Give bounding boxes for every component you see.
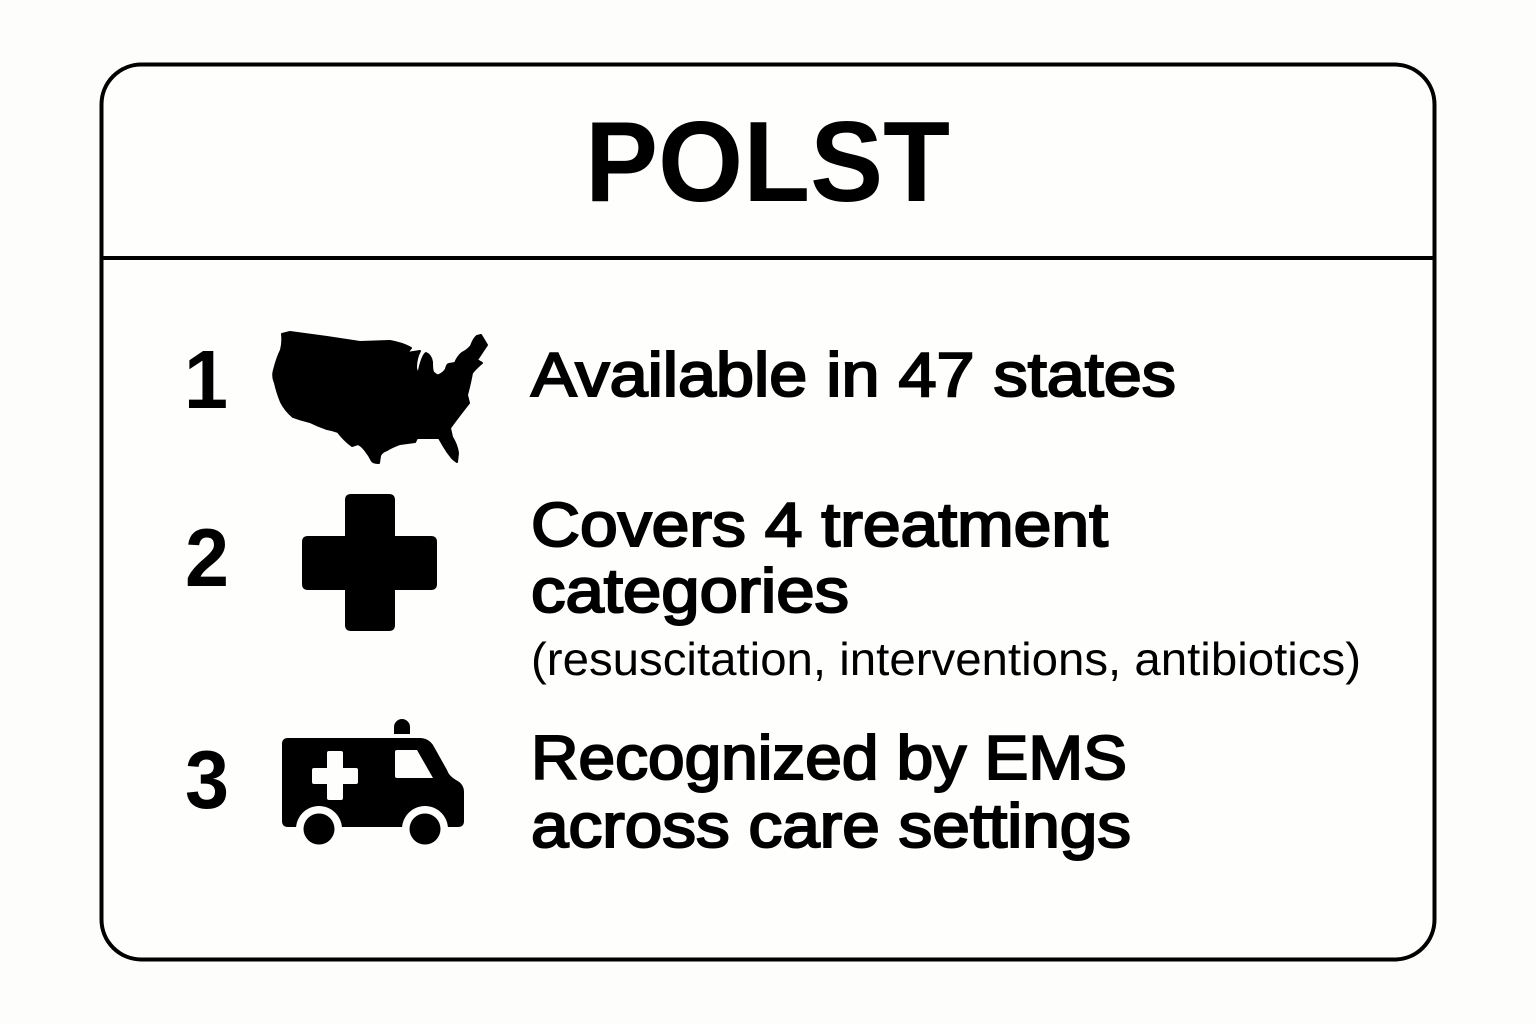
label: covers 4 treatment categories [531,491,1108,626]
icon: medical cross [302,494,437,631]
number 2: 2 [185,511,229,604]
label: covers 4 treatment categories: categories [531,557,849,626]
panel: POLST card [102,64,1434,960]
title: POLST [585,99,950,226]
label: available in 47 states: Available in 47 states [531,341,1176,410]
number 1: 1 [184,333,228,426]
label: covers 4 treatment categories: Covers 4 treatment [531,491,1108,560]
label: recognized by EMS across care settings: across care settings [531,792,1131,861]
number 3: 3 [185,733,229,826]
icon: ambulance [282,719,464,852]
row 2: covers 4 treatment categories [185,491,1361,685]
sublabel: treatment list: (resuscitation, interventions, antibiotics) [531,633,1361,685]
label: recognized by EMS across care settings: Recognized by EMS [531,724,1127,793]
row 1: available in 47 states [184,332,1176,463]
icon: United States map [273,332,487,463]
row 3: recognized by EMS [185,719,1131,861]
label: recognized by EMS across care settings [531,724,1131,861]
